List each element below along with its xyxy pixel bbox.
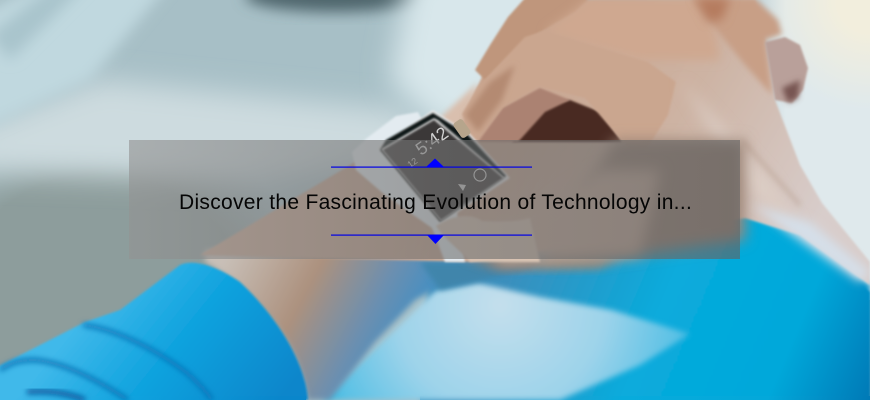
photo: top knuckles — [545, 0, 720, 60]
photo: smartwatch: 12 — [405, 156, 419, 170]
photo: lower thumb — [436, 216, 540, 262]
photo: hand — [200, 0, 870, 285]
photo: left sleeve — [0, 263, 308, 400]
title: Discover the Fascinating Evolution of Technology in... — [179, 191, 692, 214]
photo: back finger — [475, 0, 590, 80]
photo: light tendons — [680, 80, 800, 230]
photo: pale fabric fold — [322, 283, 690, 400]
photo: little finger — [765, 37, 808, 103]
photo: shadowed palm — [540, 140, 745, 262]
photo: shadow under index finger — [512, 100, 622, 142]
photo: smartwatch — [352, 110, 510, 262]
photo: right sleeve — [420, 215, 870, 400]
photo: pink palm fold — [478, 88, 570, 142]
photo: forearm — [205, 250, 480, 400]
photo: index finger — [462, 31, 676, 160]
top divider with diamond — [331, 158, 532, 168]
photo: cuff highlight — [752, 205, 870, 282]
bottom divider with diamond — [331, 234, 532, 244]
photo: smartwatch: 5:42 — [412, 123, 452, 159]
panel: translucent title box — [129, 140, 740, 259]
